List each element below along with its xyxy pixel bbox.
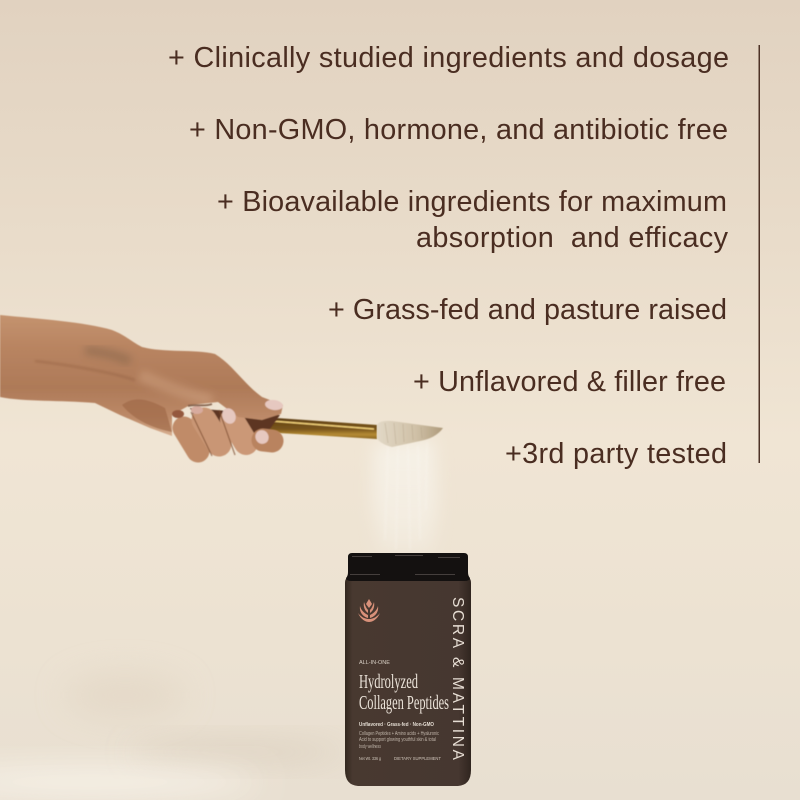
label: description: body wellness [359, 744, 381, 750]
middle finger [232, 420, 246, 443]
claim: third party tested: +3rd party tested [505, 438, 727, 470]
claim: grass-fed: + Grass-fed and pasture raised [328, 294, 727, 326]
claim: unflavored: + Unflavored & filler free [413, 366, 726, 398]
claim: clinically studied: + Clinically studied ingredients and dosage [168, 42, 729, 74]
claim: non-GMO: + Non-GMO, hormone, and antibiotic free [189, 114, 728, 146]
claim: bioavailable: absorption and efficacy [416, 222, 729, 254]
vertical rule [758, 45, 760, 463]
shadow between fingers [190, 408, 280, 440]
label: description [359, 731, 439, 750]
claims list [168, 42, 729, 470]
label: product name [359, 671, 449, 714]
logo [358, 599, 380, 622]
claim: bioavailable: + Bioavailable ingredients for maximum [217, 186, 727, 218]
label: product name: Collagen Peptides [359, 692, 449, 714]
little finger [184, 428, 198, 451]
label: brand name: SCRA & MATTINA [449, 597, 466, 761]
label: product name: Hydrolyzed [359, 671, 418, 693]
claim: bioavailable [217, 186, 729, 254]
tendon shading [35, 361, 135, 380]
label: attributes: Unflavored · Grass-fed · Non-GMO [359, 722, 435, 728]
ring finger [204, 420, 219, 444]
index finger [263, 440, 272, 441]
jar lid [346, 553, 470, 581]
label: dietary supplement: DIETARY SUPPLEMENT [394, 756, 441, 762]
label: net weight: Net Wt. 336 g [359, 756, 381, 762]
gold handle [262, 417, 377, 439]
powder pile [377, 421, 443, 447]
finger separators [191, 410, 235, 456]
dark nail gap [172, 410, 184, 418]
label: description: Collagen Peptides + Amino acids + Hyaluronic [359, 731, 439, 737]
forearm and back of hand [0, 315, 283, 436]
collagen jar [345, 553, 471, 786]
label: description: Acid to support glowing youthful skin & total [359, 737, 436, 743]
label: all-in-one: ALL-IN-ONE [359, 660, 390, 666]
scoop [262, 417, 443, 447]
powder stream [372, 440, 438, 553]
knuckle crease [188, 404, 212, 406]
fingernails [191, 399, 284, 446]
palm shadow [122, 399, 172, 432]
hand and arm [0, 315, 284, 456]
jar body [345, 577, 471, 786]
